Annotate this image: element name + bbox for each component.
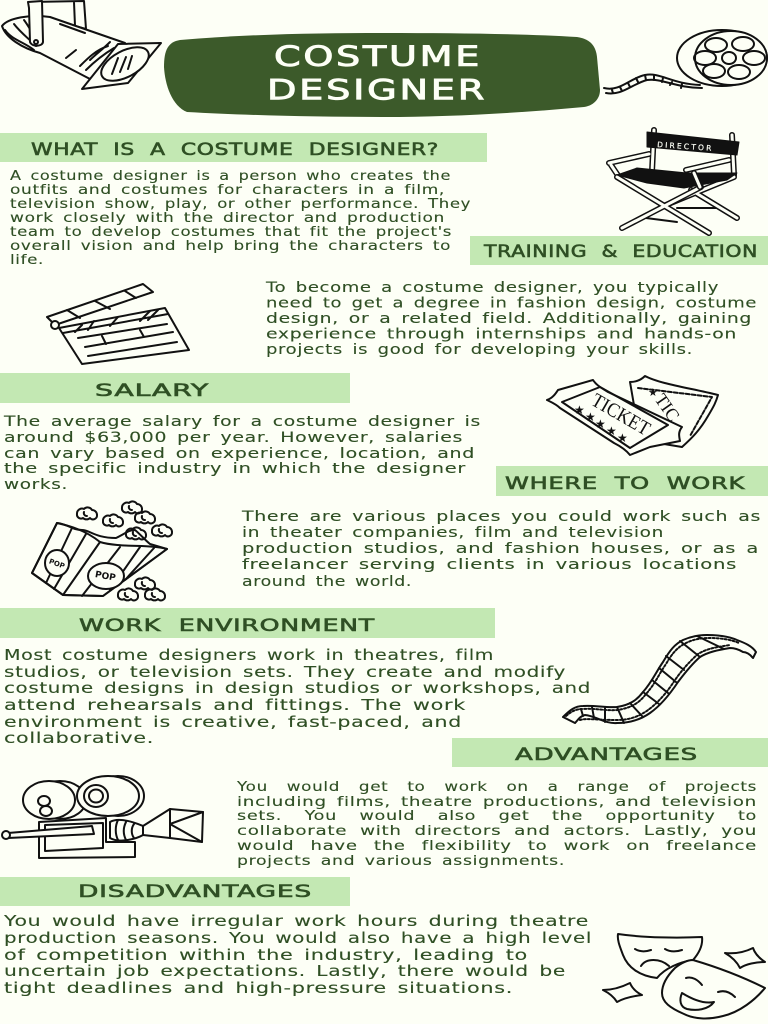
text block: where to work: in theater companies, film and television	[242, 525, 664, 541]
text block: salary: works.	[4, 477, 68, 493]
section heading: advantages: ADVANTAGES	[515, 745, 698, 765]
title banner: COSTUME	[274, 40, 482, 72]
text block: advantages: collaborate with directors and actors. Lastly, you	[237, 824, 757, 839]
icon: film strip	[563, 635, 756, 723]
icon: cinema tickets: ★	[648, 386, 658, 399]
icon: popcorn box: POP	[94, 570, 117, 584]
icon: popcorn box	[32, 501, 172, 600]
text block: salary: can vary based on experience, location, and	[4, 446, 475, 462]
section heading: salary: SALARY	[95, 381, 209, 401]
title banner	[164, 33, 600, 117]
text block: work environment: studios, or television sets. They create and modify	[4, 663, 566, 681]
icon: clapperboard	[47, 284, 189, 364]
text block: what is a costume designer: overall vision and help bring the characters to	[10, 239, 451, 254]
text block: advantages: sets. You would also get the opportunity to	[237, 809, 757, 824]
text block: salary: The average salary for a costume designer is	[3, 414, 481, 430]
text block: where to work: There are various places you could work such as	[241, 509, 761, 525]
section heading: what is a costume designer	[0, 133, 487, 162]
text block: where to work: freelancer serving clients in various locations	[242, 557, 737, 573]
icon: stage spotlight	[2, 1, 161, 89]
text block: salary	[3, 414, 481, 493]
icon: theatre masks	[603, 934, 765, 1018]
text block: work environment: collaborative.	[4, 729, 154, 747]
text block: disadvantages: tight deadlines and high-pressure situations.	[4, 979, 513, 997]
text block: disadvantages: production seasons. You would also have a high level	[4, 929, 592, 947]
icon: cinema tickets: ★	[606, 424, 617, 438]
icon: cinema tickets	[547, 376, 718, 455]
text block: where to work: around the world.	[242, 574, 412, 590]
section heading: training and education	[470, 236, 768, 265]
icon: director chair	[609, 130, 739, 233]
text block: work environment: environment is creative, fast-paced, and	[4, 713, 462, 731]
text block: training and education: projects is good for developing your skills.	[266, 342, 693, 358]
text block: training and education: To become a costume designer, you typically	[265, 280, 719, 296]
section heading: work environment	[0, 608, 495, 638]
text block: what is a costume designer: team to develop costumes that fit the project's	[10, 225, 452, 240]
section heading: disadvantages: DISADVANTAGES	[78, 882, 312, 902]
text block: what is a costume designer: outfits and costumes for characters in a film,	[10, 183, 445, 198]
text block: work environment: Most costume designers work in theatres, film	[4, 646, 494, 664]
section heading: disadvantages	[0, 877, 350, 906]
text block: work environment: costume designs in design studios or workshops, and	[4, 679, 591, 697]
icon: movie camera	[2, 776, 203, 858]
text block: training and education: design, or a related field. Additionally, gaining	[266, 311, 752, 327]
text block: salary: the specific industry in which the designer	[4, 461, 466, 477]
text block: disadvantages: You would have irregular work hours during theatre	[3, 912, 589, 930]
icon: cinema tickets: ★	[574, 403, 585, 417]
section heading: what is a costume designer: WHAT IS A COSTUME DESIGNER?	[31, 140, 439, 160]
section heading: training and education: TRAINING & EDUCATION	[483, 242, 758, 262]
text block: advantages: You would get to work on a range of projects	[236, 780, 757, 795]
icon: cinema tickets: TICKET	[588, 389, 654, 440]
text block: disadvantages: uncertain job expectations. Lastly, there would be	[4, 962, 566, 980]
text block: training and education: experience through internships and hands-on	[266, 326, 737, 342]
icon: film reel	[604, 30, 767, 93]
text block: what is a costume designer: television show, play, or other performance. They	[10, 197, 471, 212]
text block: where to work	[241, 509, 761, 590]
text block: advantages	[236, 780, 757, 869]
text block: what is a costume designer: A costume designer is a person who creates the	[10, 169, 451, 184]
text block: what is a costume designer: work closely with the director and production	[10, 211, 445, 226]
icon: cinema tickets: ★	[595, 417, 606, 431]
text block: where to work: production studios, and fashion houses, or as a	[242, 541, 759, 557]
icon: cinema tickets: TIC	[651, 390, 684, 425]
text block: disadvantages: of competition within the industry, leading to	[4, 946, 528, 964]
title banner: DESIGNER	[267, 73, 487, 106]
section heading: advantages	[452, 738, 768, 767]
icon: cinema tickets: ★	[585, 410, 596, 424]
text block: work environment	[4, 646, 591, 747]
section heading: where to work	[496, 466, 768, 496]
text block: what is a costume designer: life.	[10, 253, 44, 268]
section heading: work environment: WORK ENVIRONMENT	[79, 616, 375, 636]
text block: advantages: including films, theatre productions, and television	[237, 795, 757, 810]
icon: cinema tickets: ★	[617, 431, 628, 445]
text block: what is a costume designer	[10, 169, 471, 268]
text block: training and education	[265, 280, 757, 358]
icon: director chair: DIRECTOR	[657, 140, 714, 153]
text block: disadvantages	[3, 912, 592, 997]
text block: salary: around $63,000 per year. However, salaries	[4, 430, 463, 446]
section heading: where to work: WHERE TO WORK	[505, 474, 745, 494]
text block: training and education: need to get a degree in fashion design, costume	[266, 296, 757, 312]
text block: work environment: attend rehearsals and fittings. The work	[4, 696, 466, 714]
section heading: salary	[0, 373, 350, 403]
text block: advantages: would have the flexibility to work on freelance	[237, 839, 757, 854]
icon: popcorn box: POP	[48, 557, 66, 571]
text block: advantages: projects and various assignments.	[237, 854, 565, 869]
